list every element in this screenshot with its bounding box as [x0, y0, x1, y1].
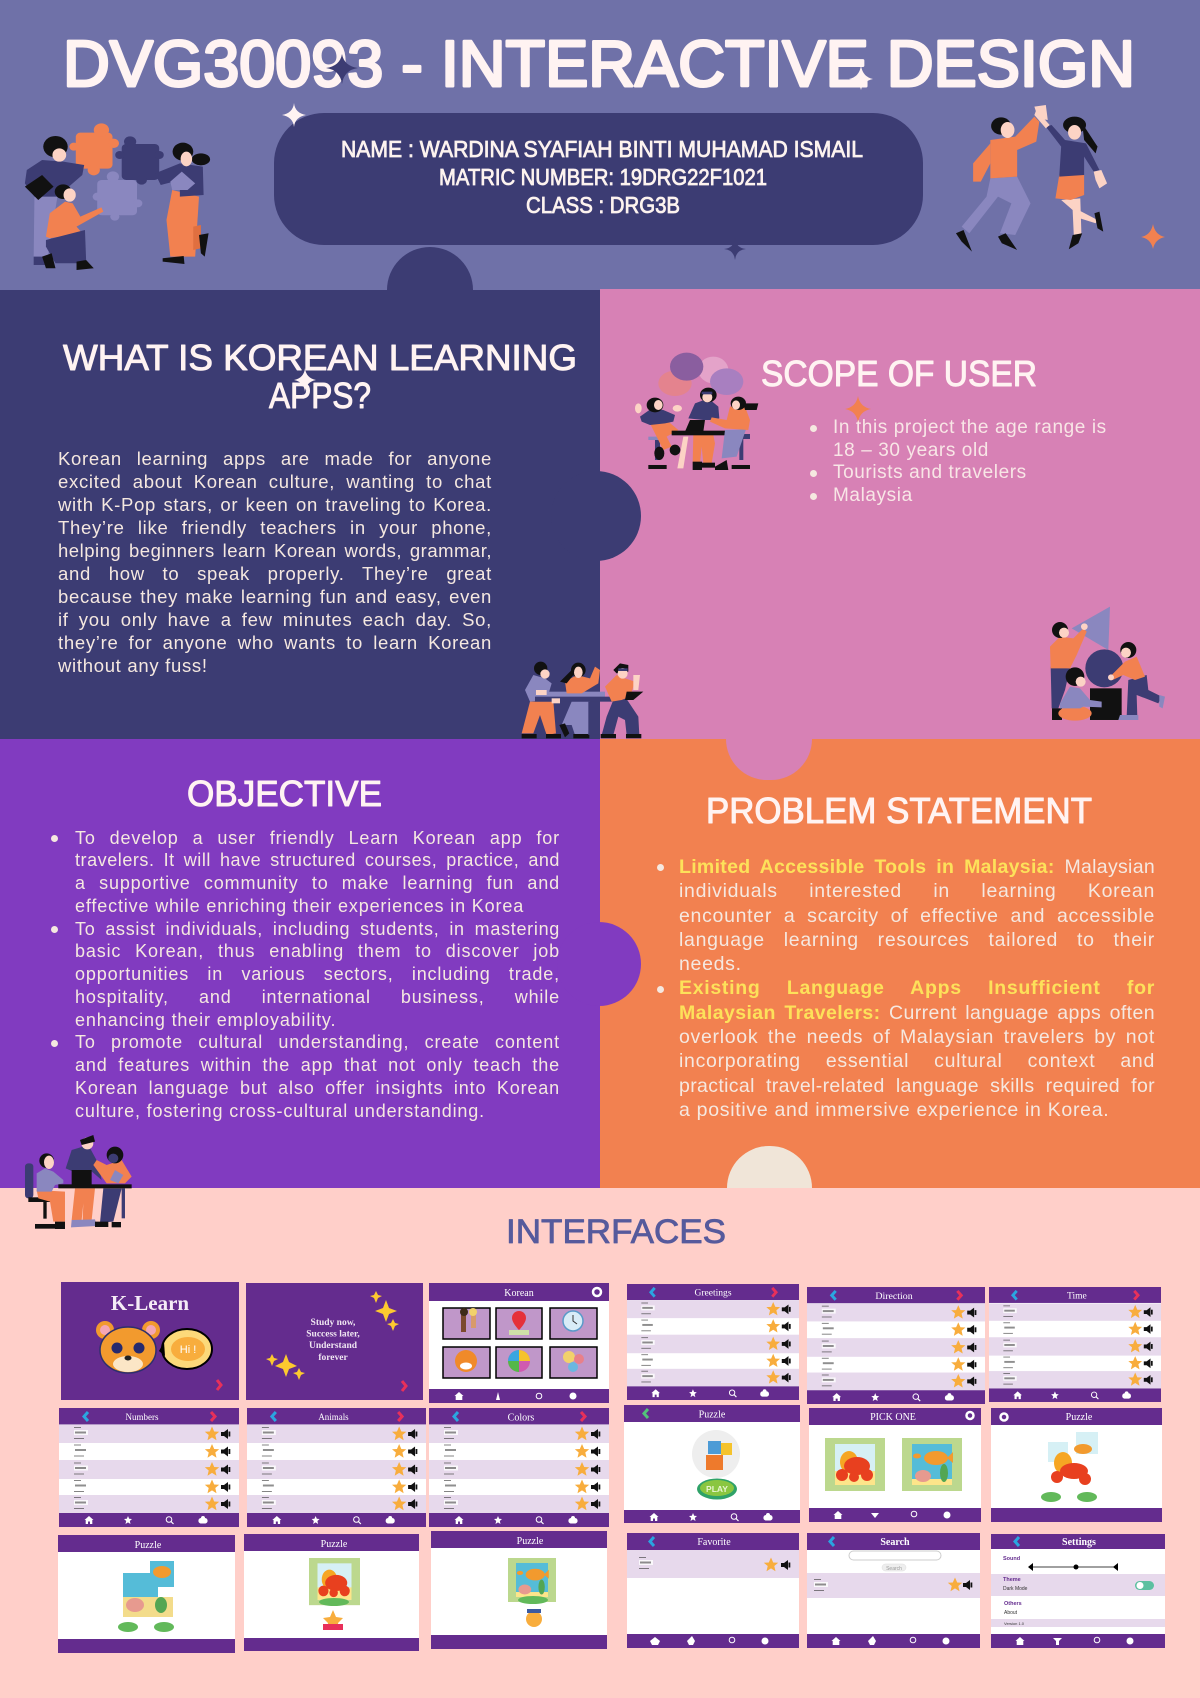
screen: study quote: forever — [318, 1353, 348, 1363]
screen: puzzle fish pieces: Puzzle — [135, 1540, 162, 1551]
screen: settings — [991, 1534, 1165, 1648]
screen: puzzle crab pieces: Puzzle — [1066, 1412, 1093, 1423]
objective list: hospitality, and international business, while — [75, 987, 560, 1007]
student details text: MATRIC NUMBER: 19DRG22F1021 — [439, 164, 767, 190]
student details text — [341, 136, 863, 218]
screen: settings: Sound — [1003, 1556, 1020, 1562]
screen: K-Learn splash: Hi ! — [180, 1344, 196, 1356]
screen: search: Search — [886, 1566, 902, 1572]
screen: puzzle fish complete: Puzzle — [517, 1536, 544, 1547]
heading: problem statement: PROBLEM STATEMENT — [706, 790, 1092, 831]
screen: pick one — [809, 1408, 981, 1522]
sparkle: orange in scope panel — [845, 396, 871, 422]
objective list: Korean language but also offer insights into Korean — [75, 1078, 560, 1098]
sparkle: white near pill — [282, 103, 306, 127]
sparkle: navy below pill — [724, 238, 746, 260]
illustration: puzzle team — [25, 123, 210, 270]
scope of user list: Malaysia — [833, 485, 913, 506]
objective list: effective while enriching their experiences in Korea — [75, 896, 524, 916]
description paragraph: if you only have a few minutes each day. So, — [58, 608, 492, 630]
description paragraph: with K-Pop stars, or keen on traveling to Korea. — [58, 494, 492, 514]
screen: puzzle crab complete: Puzzle — [321, 1539, 348, 1550]
screen: puzzle play: PLAY — [706, 1484, 728, 1494]
heading: interfaces: INTERFACES — [506, 1213, 726, 1251]
problem statement list: encounter a scarcity of effective and accessible — [679, 905, 1155, 927]
screen: pick one: PICK ONE — [870, 1412, 916, 1423]
illustration: meeting with speech bubbles — [635, 353, 758, 470]
screen: Direction: Direction — [875, 1291, 913, 1302]
screen: study quote: Success later, — [306, 1330, 360, 1340]
problem statement list: incorporating essential cultural context and — [679, 1050, 1155, 1072]
screen: settings: About — [1004, 1610, 1018, 1616]
screen: settings: Settings — [1062, 1537, 1096, 1548]
heading: what is korean learning apps — [62, 337, 577, 416]
objective list: opportunities in various sectors, including trade, — [75, 964, 560, 984]
sparkle: orange in header — [1141, 224, 1165, 249]
description paragraph: Korean learning apps are made for anyone — [58, 448, 492, 468]
screen: settings: Version 1.0 — [1004, 1621, 1025, 1626]
navy puzzle knob top — [387, 247, 473, 290]
problem statement list: overlook the needs of Malaysian travelers by not — [679, 1026, 1155, 1048]
screen: Colors — [429, 1408, 609, 1527]
objective list: To promote cultural understanding, create content — [75, 1032, 560, 1052]
objective list: culture, fostering cross-cultural understanding. — [75, 1101, 485, 1121]
panel: scope of user — [600, 289, 1200, 739]
sparkle: white on heading — [294, 368, 316, 392]
problem statement list — [657, 856, 1155, 1121]
description paragraph — [58, 448, 492, 676]
heading: objective: OBJECTIVE — [187, 773, 382, 814]
screen: study quote: Study now, — [311, 1318, 356, 1328]
screen: puzzle fish complete — [431, 1531, 607, 1649]
student details text: NAME : WARDINA SYAFIAH BINTI MUHAMAD ISMAIL — [341, 136, 863, 162]
screen: favorite — [627, 1533, 799, 1648]
screen: study quote: Understand — [309, 1341, 358, 1351]
title: DVG30093 - INTERACTIVE DESIGN — [63, 27, 1135, 100]
problem statement list: individuals interested in learning Korean — [679, 880, 1155, 902]
heading: what is korean learning apps: WHAT IS KOREAN LEARNING — [63, 337, 577, 378]
screen: puzzle play — [624, 1405, 800, 1523]
description paragraph: without any fuss! — [58, 654, 208, 676]
screen: Korean menu: Korean — [504, 1288, 534, 1299]
screen: puzzle fish pieces — [58, 1535, 235, 1653]
objective list: a supportive community to make learning fun and — [75, 873, 560, 893]
student details text: CLASS : DRG3B — [526, 192, 680, 218]
description paragraph: and how to speak properly. They’re great — [58, 562, 492, 584]
description paragraph: helping beginners learn Korean words, grammar, — [58, 540, 492, 560]
heading: scope of user: SCOPE OF USER — [761, 353, 1037, 394]
description paragraph: They’re like friendly teachers in your phone, — [58, 516, 492, 538]
screen: Colors: Colors — [508, 1412, 534, 1424]
screen: Numbers: Numbers — [126, 1412, 159, 1422]
cream puzzle knob — [727, 1146, 812, 1188]
panel: header — [0, 0, 1200, 290]
scope of user list — [810, 417, 1107, 506]
objective list — [51, 828, 560, 1121]
screen: Korean menu — [429, 1283, 609, 1403]
navy puzzle knob right — [551, 471, 641, 561]
objective list: travelers. It will have structured courses, practice, and — [75, 850, 560, 870]
description paragraph: excited about Korean culture, wanting to chat — [58, 470, 492, 492]
problem statement list: Malaysian Travelers: Current language apps often — [679, 1002, 1155, 1024]
panel: interfaces — [0, 1188, 1200, 1698]
screen: puzzle play: Puzzle — [699, 1410, 726, 1420]
illustration: desk team — [25, 1135, 132, 1229]
illustration: team carrying bar — [522, 662, 643, 738]
screen: favorite: Favorite — [697, 1537, 731, 1548]
screen: Time: Time — [1067, 1291, 1087, 1302]
sparkle: navy on title — [326, 54, 358, 84]
objective list: enhancing their employability. — [75, 1010, 336, 1030]
panel: problem statement — [600, 739, 1200, 1188]
screen: Animals — [247, 1408, 426, 1527]
scope of user list: In this project the age range is — [833, 417, 1107, 438]
screen: puzzle crab complete — [244, 1534, 419, 1651]
description paragraph: they’re for anyone who wants to learn Korean — [58, 632, 492, 652]
screen: search — [807, 1533, 980, 1648]
heading: what is korean learning apps: APPS? — [269, 375, 371, 416]
screen: K-Learn splash: K-Learn — [111, 1291, 189, 1315]
scope of user list: Tourists and travelers — [833, 462, 1027, 483]
purple puzzle knob — [557, 922, 641, 1006]
screen: Greetings — [627, 1284, 799, 1400]
screen: Numbers — [59, 1408, 239, 1527]
objective list: To develop a user friendly Learn Korean app for — [75, 828, 560, 848]
screen: Direction — [807, 1287, 985, 1404]
problem statement list: language learning resources tailored to their — [679, 929, 1155, 951]
screen: Greetings: Greetings — [694, 1288, 732, 1299]
description paragraph: because they make learning fun and easy, even — [58, 586, 492, 606]
problem statement list: a positive and immersive experience in Korea. — [679, 1099, 1109, 1121]
problem statement list: Existing Language Apps Insufficient for — [679, 977, 1155, 999]
objective list: and features within the app that not only teach the — [75, 1055, 560, 1075]
illustration: high five — [956, 105, 1107, 252]
screen: search: Search — [880, 1537, 910, 1548]
illustration: team with shapes — [1050, 607, 1165, 721]
objective list: basic Korean, thus enabling them to discover job — [75, 941, 560, 961]
sparkle: white on title — [849, 66, 873, 90]
screen: Time — [989, 1287, 1161, 1402]
objective list: To assist individuals, including students, in mastering — [75, 919, 560, 939]
student details pill — [274, 113, 923, 245]
screen: settings: Dark Mode — [1003, 1586, 1028, 1592]
screen: K-Learn splash — [61, 1282, 239, 1400]
pink puzzle knob — [726, 739, 812, 780]
problem statement list: needs. — [679, 953, 742, 975]
panel: what is korean learning apps — [0, 290, 600, 739]
panel: objective — [0, 739, 600, 1188]
screen: puzzle crab pieces — [991, 1408, 1162, 1522]
screen: settings: Theme — [1003, 1577, 1021, 1583]
screen: study quote — [246, 1283, 423, 1400]
screen: Animals: Animals — [318, 1412, 349, 1422]
problem statement list: practical travel-related language skills required for — [679, 1075, 1155, 1097]
screen: settings: Others — [1004, 1601, 1022, 1607]
problem statement list: Limited Accessible Tools in Malaysia: Malaysian — [679, 856, 1155, 878]
scope of user list: 18 – 30 years old — [833, 440, 989, 461]
